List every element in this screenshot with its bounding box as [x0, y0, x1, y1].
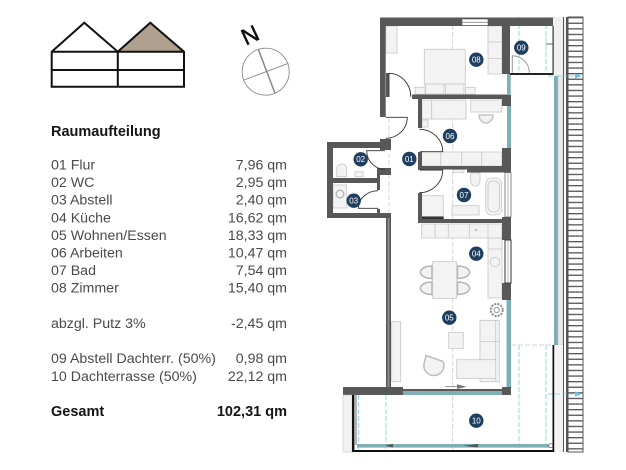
room area table: 02 WC — [51, 175, 94, 191]
badge 03 — [346, 194, 361, 208]
room area table: 06 Arbeiten — [51, 246, 123, 262]
badge 08 — [469, 52, 483, 67]
icon: north compass: N — [237, 20, 263, 50]
furniture: room 08 — [386, 26, 502, 94]
badge 10: 10 — [472, 416, 481, 426]
badge 01 — [402, 152, 416, 166]
room area table: 04 Küche — [51, 210, 111, 226]
terrace rows: 0,98 qm — [236, 351, 287, 367]
terrace 10 edge and railing — [343, 345, 554, 452]
terrace rows: 10 Dachterrasse (50%) — [51, 369, 197, 385]
floor plan — [327, 17, 583, 452]
plaster deduction row — [51, 316, 287, 332]
room area table: 10,47 qm — [228, 246, 287, 262]
room area table: 07 Bad — [51, 263, 96, 279]
badge 06 — [443, 129, 457, 143]
furniture: bathroom 07 — [422, 170, 502, 220]
total row — [51, 404, 287, 420]
badge 02 — [354, 152, 368, 166]
furniture: room 06 — [421, 100, 502, 166]
glazing: teal window walls — [403, 74, 511, 395]
icon: building section with highlighted unit — [52, 23, 184, 87]
badge 10 — [469, 414, 483, 428]
room area table: 15,40 qm — [228, 281, 287, 297]
badge 02: 02 — [356, 155, 366, 164]
badge 01: 01 — [405, 155, 414, 164]
furniture: WC and storage — [333, 164, 363, 208]
room area table: 08 Zimmer — [51, 281, 119, 297]
furniture: living room 05 — [392, 304, 503, 389]
heading: Raumaufteilung: Raumaufteilung — [51, 124, 161, 140]
badge 08: 08 — [472, 56, 481, 64]
walls — [327, 18, 553, 395]
badge 05 — [442, 310, 456, 325]
plaster deduction row: abzgl. Putz 3% — [51, 316, 146, 332]
room area table: 2,40 qm — [236, 193, 287, 209]
icon: north compass — [237, 20, 289, 95]
room area table: 16,62 qm — [228, 210, 287, 226]
furniture: dining table — [420, 262, 470, 298]
room area table: 7,96 qm — [236, 158, 287, 174]
room area table: 18,33 qm — [228, 228, 287, 244]
room area table: 03 Abstell — [51, 193, 113, 209]
room area table: 01 Flur — [51, 158, 95, 174]
facade strip with railing — [553, 17, 583, 452]
room area table: 05 Wohnen/Essen — [51, 228, 167, 244]
badge 04: 04 — [472, 250, 481, 258]
badge 04 — [469, 246, 483, 261]
storage 09 outline — [510, 26, 554, 75]
terrace rows — [51, 351, 287, 385]
total row: 102,31 qm — [217, 404, 287, 420]
room area table — [51, 158, 287, 297]
room badges — [346, 40, 528, 428]
total row: Gesamt — [51, 404, 104, 420]
badge 09 — [514, 40, 528, 55]
badge 05: 05 — [445, 314, 454, 322]
badge 07 — [457, 188, 471, 202]
axis lines — [358, 17, 582, 452]
room area table: 2,95 qm — [236, 175, 287, 191]
furniture: kitchen 04 — [422, 224, 502, 298]
room area table: 7,54 qm — [236, 263, 287, 279]
terrace rows: 09 Abstell Dachterr. (50%) — [51, 351, 216, 367]
doors — [358, 56, 529, 208]
plaster deduction row: -2,45 qm — [231, 316, 287, 332]
windows — [462, 19, 511, 283]
badge 07: 07 — [460, 191, 469, 200]
terrace rows: 22,12 qm — [228, 369, 287, 385]
badge 09: 09 — [517, 44, 526, 52]
badge 06: 06 — [446, 132, 455, 141]
badge 03: 03 — [349, 196, 359, 206]
